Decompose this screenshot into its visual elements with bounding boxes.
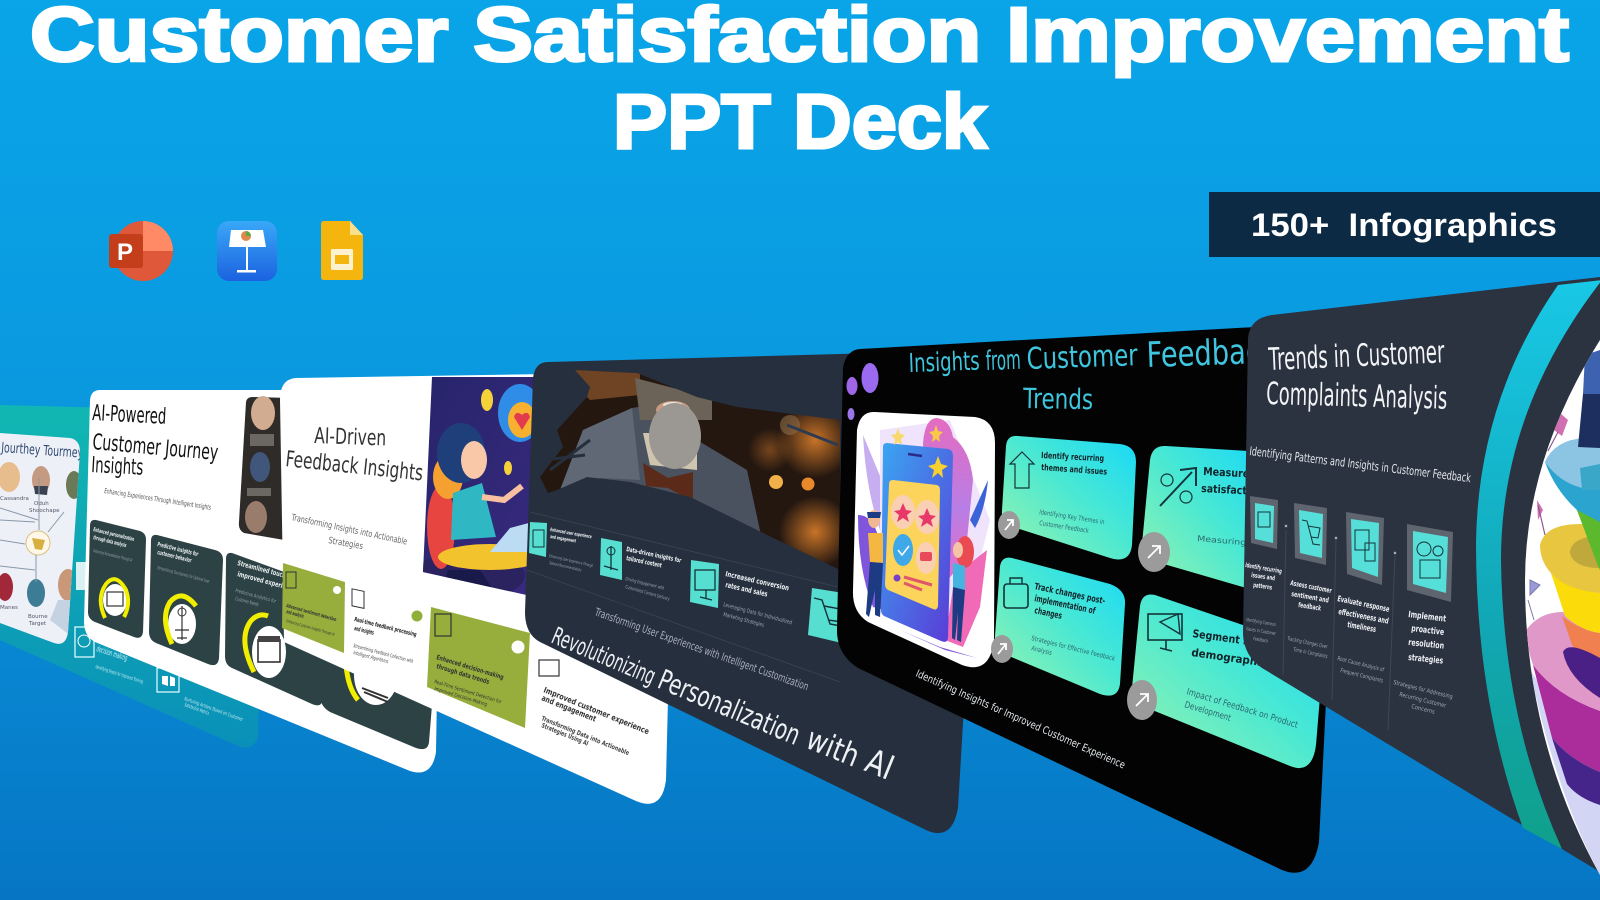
step 1: patterns — [1253, 581, 1273, 592]
teal arc band — [1476, 280, 1600, 849]
card: measure satisfaction — [1142, 446, 1304, 592]
step 4: resolution — [1408, 638, 1445, 652]
step 4: proactive — [1411, 624, 1445, 638]
step 2: Tracking Changes Over — [1286, 636, 1328, 651]
item 4 — [808, 588, 850, 645]
panel: slide 2 AI-powered customer journey — [84, 390, 442, 772]
diagram people: Manes — [0, 605, 18, 611]
item 1: and engagement — [550, 534, 577, 545]
card 1: Delivering Personalization Through AI — [93, 548, 133, 564]
yellow layer — [1550, 570, 1600, 633]
heading: Complaints Analysis — [1266, 376, 1448, 417]
icon: Keynote — [217, 221, 277, 281]
step 4: Strategies for Addressing — [1393, 679, 1454, 701]
lower feedback item: Transforming Data into Actionable — [540, 714, 631, 757]
card 1 — [88, 520, 146, 638]
card 2 — [149, 535, 223, 665]
card: measure satisfaction: Measuring Sa — [1197, 534, 1261, 549]
panel: slide 3 AI-driven feedback insights — [280, 370, 676, 804]
step 1: Identify recurring — [1245, 561, 1283, 575]
card 3: improved experience — [236, 570, 297, 594]
decorative dots — [846, 363, 878, 420]
panel: slide 1 customer journey: Satisfaction Metrics — [183, 702, 210, 717]
item 2: Customized Content Delivery — [624, 584, 670, 603]
step dividers — [1283, 524, 1396, 730]
card: identify recurring themes — [1002, 436, 1136, 559]
step 1: Feedback — [1253, 636, 1269, 645]
card: segment feedback: Development — [1183, 700, 1232, 724]
card 1: Enhanced personalization — [93, 527, 135, 543]
step 4: strategies — [1408, 653, 1444, 667]
lower feedback item: Improved customer experience — [542, 686, 651, 736]
green card right: Enhanced decision-making — [435, 653, 505, 681]
step 2: feedback — [1298, 601, 1322, 613]
base lavender — [1530, 670, 1600, 875]
step 4 — [1393, 524, 1454, 716]
heading: AI — [860, 741, 900, 788]
subtitle: Transforming Insights into Actionable — [290, 513, 408, 548]
portrait column — [239, 396, 290, 541]
step 3 — [1337, 512, 1391, 685]
heading: Trends — [1022, 382, 1093, 416]
step 4: Concerns — [1411, 703, 1435, 716]
figure: man — [868, 510, 880, 528]
heading — [91, 401, 219, 481]
card: identify recurring themes: Identifying Key Themes in — [1039, 508, 1105, 526]
item 3: Leveraging Data for Individualized — [722, 602, 793, 626]
badge: 150+ Infographics — [1209, 192, 1600, 257]
panel: slide 6 trends in complaints — [1243, 277, 1600, 875]
icon: PowerPoint — [109, 221, 173, 281]
card: segment feedback — [1132, 594, 1322, 768]
card: track changes: implementation of — [1033, 594, 1096, 617]
heading: Feedback Insights — [284, 447, 424, 486]
card: identify recurring themes: Identify recurring — [1041, 451, 1104, 464]
item 3 — [690, 560, 793, 629]
subtitle: Identifying Patterns and Insights in Customer Feedback — [1249, 444, 1472, 485]
heading: AI-Powered — [92, 401, 167, 430]
heading: Trends in Customer — [1267, 334, 1445, 378]
photo: man in bow tie — [540, 370, 840, 570]
subtitle — [290, 513, 408, 552]
step 2: sentiment and — [1291, 590, 1329, 605]
card: segment feedback: demographics — [1191, 646, 1274, 670]
step 4: Recurring Customer — [1399, 691, 1447, 710]
item 1: Enhanced user experience — [550, 527, 592, 540]
heading: Revolutionizing — [548, 622, 660, 691]
orange — [1562, 616, 1600, 662]
blue disc — [1545, 438, 1600, 522]
illustration: phone with ratings — [853, 412, 995, 667]
green card left — [282, 563, 345, 653]
heading — [548, 622, 900, 788]
green card right: Real-Time Sentiment Detection for — [433, 679, 503, 706]
heading: AI-Driven — [314, 424, 387, 452]
card: track changes: Track changes post- — [1033, 582, 1106, 607]
middle feedback item — [352, 589, 422, 665]
card: segment feedback: Segment feedback — [1192, 627, 1293, 654]
step 3: Root Cause Analysis of — [1337, 656, 1385, 674]
lower icons and text — [76, 562, 86, 590]
item 2: Driving Engagement with — [625, 576, 665, 592]
card 2: Predictive insights for — [157, 541, 199, 558]
card 3 — [225, 553, 322, 705]
subtitle: Transforming User Experiences with Intelligent Customization — [592, 605, 810, 693]
step 2: Assess customer — [1290, 579, 1333, 595]
step 1: Identifying Common — [1246, 617, 1276, 628]
plants — [1537, 413, 1568, 520]
item 1: Tailored Recommendations — [548, 560, 582, 572]
middle feedback item: Real-time feedback processing — [354, 616, 417, 638]
middle feedback item: and insights — [354, 625, 375, 637]
title — [30, 0, 1569, 165]
heading: Personalization — [653, 663, 805, 752]
item 2: Data-driven insights for — [626, 545, 683, 565]
panel: slide 5 insights from customer feedback — [837, 322, 1345, 873]
heading: Insights — [908, 347, 980, 379]
panel: slide 1 customer journey: Nurturing Actions Based on Customer — [183, 696, 244, 723]
item 1: Enhancing User Experience Through — [549, 553, 594, 568]
green card left: and analysis — [285, 609, 304, 620]
dark purple — [1563, 647, 1600, 698]
card: track changes: Strategies for Effective Feedback — [1031, 634, 1116, 663]
step 3: effectiveness and — [1338, 607, 1390, 626]
green card right: Improved Decision-Making — [433, 686, 488, 708]
card: track changes — [995, 558, 1125, 696]
diagram people: Cassandra — [0, 496, 29, 502]
item 2: tailored content — [626, 554, 662, 569]
diagram people: Oduh — [34, 501, 49, 507]
step 3: Evaluate response — [1337, 594, 1391, 614]
badge: 150+ Infographics: 150+ Infographics — [1251, 207, 1557, 243]
diagram people: Jourthey Tourmey — [0, 440, 84, 462]
heading: Customer Journey — [91, 430, 219, 466]
panel: slide 1 customer journey: decision making — [95, 644, 129, 663]
card 3: Customer Needs — [234, 596, 259, 608]
subtitle: Strategies — [327, 536, 364, 552]
step 1: issues and — [1251, 571, 1276, 582]
icon: PowerPoint: P — [117, 239, 133, 266]
panel: slide 1 customer journey — [0, 405, 265, 748]
figure: woman — [956, 536, 974, 568]
panel: slide 4 personalization with AI — [525, 350, 985, 833]
icon: Google Slides — [321, 221, 363, 280]
card: identify recurring themes: themes and issues — [1041, 463, 1107, 478]
step 3: timeliness — [1347, 620, 1377, 634]
card: measure satisfaction: satisfaction — [1201, 482, 1263, 498]
diagram sheet — [0, 433, 80, 644]
heading — [284, 424, 424, 486]
funnel illustration — [1525, 340, 1600, 875]
arrow buttons — [991, 511, 1170, 720]
deep purple layer — [1552, 738, 1600, 805]
pink disc — [1527, 612, 1600, 711]
card: segment feedback: Impact of Feedback on Product — [1185, 687, 1299, 731]
step 2 — [1286, 503, 1333, 660]
green card right: through data trends — [435, 662, 490, 686]
lower feedback item: Strategies Using AI — [540, 721, 590, 748]
card: track changes: changes — [1033, 606, 1063, 622]
card 3: Streamlined touchpoints for — [236, 559, 312, 587]
diagram people: Bourne — [28, 614, 48, 620]
person — [1583, 350, 1600, 394]
green card right — [427, 607, 530, 728]
green card left: Enhancing Customer Insights Through AI — [286, 618, 335, 637]
heading: Insights — [91, 453, 144, 481]
item 3: rates and sales — [725, 580, 769, 599]
subtitle: Enhancing Experiences Through Intelligent Insights — [104, 487, 212, 512]
panel: slide 1 customer journey: Identifying Needs for Improved Training — [94, 664, 144, 685]
card: identify recurring themes: Customer Feedback — [1039, 519, 1089, 535]
diagram people: Target — [28, 621, 47, 627]
card: track changes: Analysis — [1031, 644, 1053, 657]
step 2: Time in Complaints — [1292, 647, 1328, 660]
divider lines — [527, 512, 850, 682]
card 3: Predictive Analytics for — [234, 588, 277, 605]
lower feedback item — [539, 660, 651, 757]
green card left: Advanced sentiment detection — [285, 603, 337, 623]
card 2: customer behavior — [157, 549, 192, 564]
step 3: Frequent Complaints — [1340, 668, 1384, 685]
middle feedback item: Intelligent Algorithms — [352, 650, 389, 665]
step 4: Implement — [1408, 610, 1447, 625]
heading: Feedback — [1146, 331, 1278, 376]
diagram people: Shoochape — [29, 508, 60, 514]
heading: with — [801, 721, 865, 775]
heading: from — [985, 345, 1021, 377]
item 3: Marketing Strategies — [722, 612, 765, 629]
step 1: Issues in Customer — [1246, 626, 1276, 637]
lower feedback item: and engagement — [540, 694, 598, 724]
middle feedback item: Streamlining Feedback Collection with — [352, 643, 414, 665]
subtitle: Identifying Insights for Improved Customer Experience — [914, 668, 1127, 771]
card 4 — [320, 645, 432, 749]
green — [1576, 510, 1600, 570]
heading — [908, 331, 1278, 416]
item 3: Increased conversion — [725, 569, 790, 593]
heading: Customer — [1026, 338, 1139, 377]
card 1: through data analysis — [93, 535, 127, 549]
step 1 — [1245, 496, 1283, 645]
item 1 — [529, 522, 594, 572]
item 2 — [600, 538, 683, 603]
card: measure satisfaction: Measure customer — [1203, 465, 1304, 483]
illustration: woman with laptop — [423, 377, 534, 595]
heading — [1266, 334, 1448, 417]
card 2: Streamlining Touchpoints for Optimal User — [156, 565, 210, 585]
diagram people — [0, 440, 84, 640]
title: PPT Deck — [613, 79, 987, 165]
magenta layer — [1533, 665, 1600, 772]
